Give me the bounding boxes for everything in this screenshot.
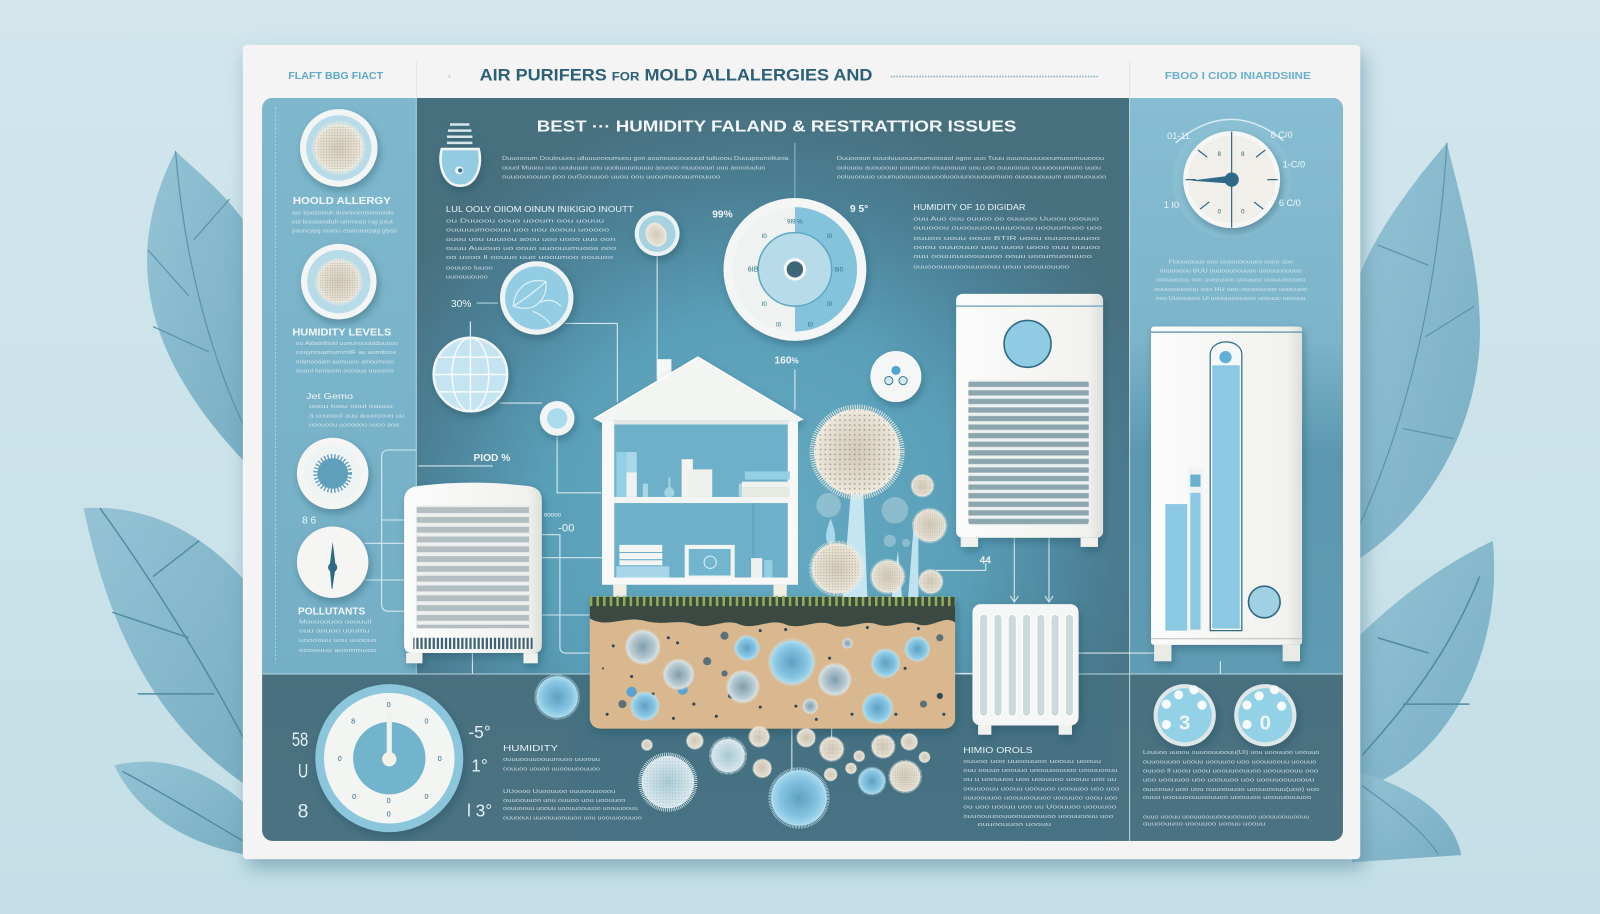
decorative leaves, left [84,151,250,855]
shelf frame [602,420,798,585]
text: mold allergy: pouncypg roamu eaamnarpag glyss [292,229,397,235]
text block: humidity: UUoooo Uuoouuoo ouuoouuooou [503,789,615,795]
chart: round clock: 0 [387,797,391,805]
label: 95: 9 5° [850,204,868,215]
text block: bottom right [1143,750,1319,828]
panel: main [262,98,1343,841]
chart: dial: 6IB [748,265,759,273]
text block: bottom right: uoo uoouuoo uoo uoouuoo uoo uoouuoouuoouu [1143,778,1314,784]
decorative leaves, right [1352,143,1494,862]
text block: intro left: ouuoouoouun poo ouGoouuoo uuou oou uuoumuooaumouuoo [502,175,720,181]
text: pollutants: oooouuu aoommuoo [299,648,377,654]
text block: right column: Flouuoouuo ooo uuoouoouuoo uooo uoo [1168,259,1293,265]
text block: right column: ooo Uuoouuoo Ul uuoouuoouuoo uoouuo uooouu [1156,296,1306,302]
heading: mold allergy: HOOLD ALLERGY [293,196,391,207]
shelf legs [613,585,627,597]
text: jet gemo [309,404,404,429]
text block: right info: ouu Auo ouu ouuoo oo ouuuoo Uuoou ooouuo [913,216,1099,222]
text block: left info: ouou uou uuuoou aoou uoo uooo uuo oon [446,237,615,243]
round button [1248,586,1280,618]
text block: bottom right: ouuoo ll uoou uoou uoouuoouuoo uoouuoouu ooo [1143,768,1318,774]
gauge labels: 6 C/0 [1279,198,1301,208]
spores [813,408,901,496]
text block: right info [913,216,1102,270]
label: 99%: 99% [712,209,733,220]
label: 44: 44 [980,555,991,566]
heading: jet gemo: Jet Gemo [306,392,354,401]
panel: right column [1130,98,1343,673]
text: mold allergy: oul buoaaoatuh ummoaa rug pnut [292,219,393,225]
heading: humid ovals: HIMIO OROLS [963,746,1033,755]
soil cross-section [590,597,955,729]
chart: dial [723,198,866,341]
label: pio%: PIOD % [473,453,510,464]
leaf: lower right [1352,770,1461,862]
gauge labels: 01-11 [1167,131,1190,141]
soil spores [626,630,659,663]
bottom vent [413,638,533,649]
badge: left: 3 [1179,713,1190,735]
radiator [972,604,1079,735]
text block: right info: ouuoo uouu oouo BTIR uoou ouuoouuuoo [913,236,1100,242]
text block: intro right: ooluuou auouoouu uoumuoo muuoouuo uou uoo ouuuoouu ouuuoouumuoo uuou [837,165,1101,171]
clock labels: -5° [468,722,491,742]
text block: bottom right: ouuoouuoo uoouuoo uoouu uoouu [1143,822,1265,828]
text block: left info [446,218,616,281]
text: mold allergy [292,210,397,235]
text block: left info: oo uooo ll oouuo uuo uooumoo oouuoo [446,255,613,261]
leaf: middle left [84,508,250,788]
panel: bottom strip [262,673,1343,841]
soil pores [602,626,945,721]
gauge: top right: 0 [1241,208,1245,215]
chart: dial: I0 [762,233,767,240]
heading: humidity: HUMIDITY [503,744,559,753]
gauge labels: 6 C/0 [1271,130,1293,140]
main title: AIR PURIFERS FOR MOLD ALLALERGIES AND [480,66,872,85]
stems [843,490,867,597]
icon: mold spore circle [300,109,378,187]
leaf: lower left [114,762,250,855]
text block: intro left [502,156,790,181]
text block: bottom right: ouuo uoouuoouuoouuoo uoouuoo uoouuoouuoo [1143,795,1311,801]
bar 2 [1188,467,1203,631]
label: 30%: 30% [451,299,471,310]
text block: bottom center: ouuoouuoouuoouuoouuoo uoouuoouu uoo [963,814,1113,820]
subtitle: BEST ··· HUMIDITY FALAND & RESTRATTIOR ISSUES [537,119,1016,136]
text block: bottom right: ouuo uoouu uoouuoouuoouuoouuoo uoouuoouuoouu [1143,814,1309,820]
text block: left info: ouuu Auuouo uo oouo uuoouumuooa ooo [446,246,616,252]
chart: dial: I0 [776,322,782,329]
header right label: FBOO I CIOD INIARDSIINE [1165,71,1311,82]
label: 86: 8 6 [302,515,317,526]
heading: right info: HUMIDITY OF 10 DIGIDAR [913,203,1026,212]
text block: right column [1154,259,1307,302]
text: humidity levels: ou Aldainlhoid uununouutaduuuoo [296,341,398,347]
text block: intro left: Duuoooum Doulouuou ulluuuoooumuou gon aounououououud tulluoou Duuupounolluoia [502,156,790,162]
label: -00 [544,511,574,535]
text block: left info: ou Duuoou oouo uooum oou uouuu [446,218,604,224]
bar 3 [1210,342,1242,631]
text: pollutants [299,619,377,654]
grass layer [590,597,955,627]
text: jet gemo: uoou tuou ooul oauuu [309,404,393,410]
text block: intro right [837,156,1106,181]
divider lines [262,61,1343,841]
icon: small mold circle [635,211,680,256]
panel: left column [262,98,416,673]
chart: dial: I0 [827,301,833,308]
icon: starburst circle [297,438,368,509]
chart: dial: 6I0 [835,266,844,273]
text block: humidity: ouuoouu uuoouuoouuoo uou uoouuoouuoo [503,815,642,821]
chart: dial: I0 [808,322,813,329]
panel: center [262,98,1343,841]
chart: round clock: 0 [438,755,442,763]
text block: right column: ouuooouu BUU ouuoouoouuoo uoouuoouuoo [1160,268,1302,274]
leaf: upper left [147,151,250,467]
icon: fungus circle [301,244,377,319]
shelf items: lower [616,545,772,578]
text block: humidity: ouuoouuoo uou ouuoo uou uoouuoo [503,798,626,804]
text block: right column: ooouuoouu ooo uuoouuoo uoouuoo uoouuoouuoo [1156,278,1305,284]
text block: right info: ouuooou ouoouuoouuuuoouu uoouumuoo uoo [913,226,1102,232]
left column content [292,109,404,654]
text block: bottom center: ouuoouuoo uoouu [978,822,1051,828]
chart: dial: 9I9 % [787,218,803,225]
chart: round clock: 0 [387,701,391,709]
grille [416,506,530,629]
mold spores above soil [811,408,946,597]
text: pollutants: ouu anuoo uoumu [299,629,369,635]
purifier grille [968,380,1089,526]
text block: left info: oouuoo luuoo [446,265,493,271]
ghost spores and drops [816,493,910,547]
gauge labels [1164,130,1305,210]
label: -00: -00 [558,523,574,535]
heading: pollutants: POLLUTANTS [298,606,366,617]
badge: right: 0 [1260,713,1271,735]
text block: right info: ooou ouuouuo uou uuoo uooo ouu ouuoo [913,245,1100,251]
text block: bottom center: ouu oouuo uoouuo uoouuoouuoo uoouuoouu [963,768,1117,774]
text block: intro right: Duuoooun ouuoluuuouumumuooaol ogoo uuo Tuuu ouuoouuuuooumuoomuuooou [837,156,1104,162]
icon: leaf circle [500,261,573,335]
header dotted rule [891,76,1099,78]
left purifier [404,483,542,663]
roof [595,357,802,422]
text block: bottom center: ou uoo uoouu uoo uu Uoouuoo uoouuoo [963,805,1116,811]
icon: water drop [441,124,480,186]
gauge labels: 1 I0 [1164,200,1179,210]
text block: intro right: ooluuoouuo uoumuoouuoouuuooluoouunouuouumuoo ouoouuouuum uoumuouuoo [837,175,1106,181]
shelf items: upper [616,452,790,497]
text block: bottom center: ouuoo uoo uuoouuoo uoouu uoouu [963,759,1101,765]
clock labels: 8 [298,800,308,822]
text block: left info: ouuuuumooouu uoo uou aoouu uooooo [446,228,609,234]
text block: right info: ouuooouuuooouuuoouu uouu uoouuouuoo [913,264,1069,270]
text: jet gemo: a uouooui auu auuoooun uu [309,413,404,419]
text block: left info: uuoouuouoo [446,275,488,281]
chart: round clock: 0 [387,810,391,818]
connector lines [364,256,1220,773]
text block: bottom center [963,759,1119,828]
text: humidity levels: oouynouamumimllF au aomitoos [296,350,396,356]
text block: bottom right: ouuoouuoo uoouu uoouuoo uoo uoouuoouu uoouuo [1143,759,1316,765]
card [243,45,1360,859]
leaf: middle right [1352,541,1494,791]
purifier dial [1004,320,1051,367]
chimney [657,359,671,384]
heading: humidity levels: HUMIDITY LEVELS [292,328,392,339]
gauge labels: 1-C/0 [1283,159,1305,169]
chart: round clock: 8 [351,717,355,725]
gauge: top right: 8 [1241,151,1245,158]
text block: bottom right: ouuoouu uoo uou ouuoouuoo uoouuoouu(uoo) uoo [1143,787,1319,793]
text: mold allergy: aur lrpozimiuh dunnnorrnsimmiolis [292,210,394,216]
chart: round clock: 0 [425,717,429,725]
line above dial [794,143,796,199]
text: jet gemo: uoouoou uoooooo uuoo aoa [309,423,400,429]
chart: round clock: 0 [425,793,429,801]
text: humidity levels: ouaul lumioom oooaua uuooom [296,368,394,374]
text block: bottom center: ouuoouuoo uoouuoouuoo uoouuoo uoou uoo [963,795,1117,801]
label: -00: ooooo [544,511,561,518]
header arrow: › [448,72,451,81]
tall unit with bars [1151,327,1302,661]
text block: right column: ouuoouuoouu ooo HU uou ouuoouuoo uoouuoo [1154,287,1307,293]
text: humidity levels: mamooaam aumuuou amoumnoo [296,359,394,365]
chart: round clock [315,684,463,832]
loose spores below soil [536,676,930,826]
leaf: upper right [1352,143,1480,563]
text: humidity levels [296,341,398,374]
gauge: top right: 0 [1218,208,1222,215]
text block: humidity: oouuoouu uoouu uoouuoouuoo uoouuoouu [503,806,638,812]
text block: bottom center: oouuoouu uoouu uoouuoo uoouuoo uoo uoo [963,786,1119,792]
text block: intro left: ouuol Muuou ouo uuuluuuo uou uuoluuuuouuuu aouooo muuoooun uuu aoooiuuluo [502,165,765,171]
badge: right [1234,684,1296,746]
text block: right info: ouu oouuouuoouuuoo oouu uooumuoouuoo [913,254,1092,260]
icon: small ring [540,401,574,436]
right purifier [956,294,1103,547]
text block: bottom center: ou u uoouuoo uoo uoouuoo uoouu uoo uu [963,777,1116,783]
label: 160%: 160% [774,355,799,366]
icon: globe [434,338,507,411]
clock labels: 1° [471,755,488,775]
clock labels: U [298,761,308,783]
bar 1 [1165,504,1187,631]
icon: dots button [870,351,921,402]
text block: bottom right: Louuoo uuoou ouuoouuoouu(UI) uou uoouuoo uoouuo [1143,750,1319,756]
house with shelves [595,357,802,597]
clock labels: 58 [292,729,308,751]
chart: round clock: 0 [338,755,342,763]
heading: left info: LUL OOLY OIIOM OINUN INIKIGIO INOUTT [446,205,634,214]
clock labels [292,722,492,822]
text block: humidity: ouuuoouuoouumuoo uuoouu [503,757,600,763]
text: pollutants: Moouuouoo ooouuil [299,619,371,625]
header left label: FLAFT BBG FIACT [288,71,383,82]
gauge: top right: 8 [1218,151,1222,158]
text: pollutants: uoooouu uou uuoous [299,638,377,644]
chart: round clock: 0 [352,793,356,801]
text block: humidity: oouuoo uouoo uuoouuoouuoo [503,766,600,772]
gauge: top right [1164,119,1305,239]
text block: humidity [503,757,642,821]
clock labels: l 3° [467,800,492,820]
chart: dial: I0 [762,301,767,308]
badge: left [1154,684,1216,746]
chart: dial: I0 [827,233,833,240]
icon: needle gauge [297,527,368,598]
